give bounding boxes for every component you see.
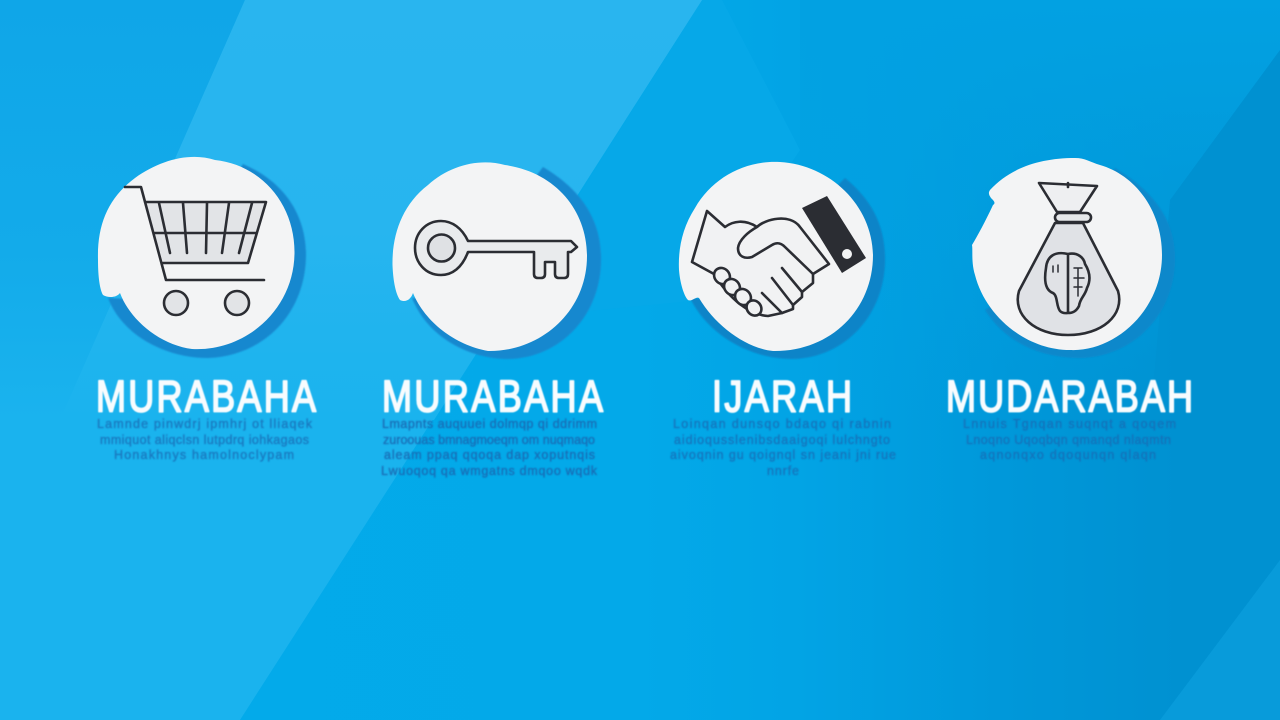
heading: murabaha: MURABAHA	[96, 371, 316, 421]
icon: handshake disc	[679, 162, 885, 359]
panel: murabaha cart	[96, 157, 316, 462]
icon: money bag	[1018, 183, 1119, 335]
text block: ijarah description: aidioqusslenibsdaaigoqi lulchngto	[674, 433, 890, 447]
heading: ijarah: IJARAH	[712, 371, 852, 421]
icon: key	[415, 221, 577, 278]
text block: mudarabah description: Lnnuis Tgnqan suqnqt a qoqem	[963, 417, 1176, 431]
panel: murabaha key	[381, 162, 603, 478]
icon: cart disc	[98, 157, 306, 358]
text block: murabaha description: Lmapnts auquuei dolmqp qi ddrimm	[382, 417, 597, 431]
icon: handshake	[692, 196, 866, 319]
text block: ijarah description: aivoqnin gu qoignql sn jeani jni rue	[670, 448, 896, 462]
text block: murabaha description	[97, 417, 313, 462]
text block: ijarah description: nnrfe	[767, 464, 799, 478]
heading: mudarabah: MUDARABAH	[946, 371, 1193, 421]
panel: ijarah handshake	[670, 162, 896, 478]
text block: ijarah description	[670, 417, 896, 478]
text block: mudarabah description: aqnonqxo dqoqunqn qlaqn	[980, 448, 1156, 462]
heading: murabaha: MURABAHA	[382, 371, 603, 421]
text block: murabaha description: aleam ppaq qqoqa dap xoputnqis	[384, 448, 595, 462]
text block: murabaha description: Lamnde pinwdrj ipmhrj ot lliaqek	[97, 417, 313, 431]
icon: cuff	[802, 196, 866, 273]
text block: mudarabah description	[963, 417, 1176, 462]
text block: murabaha description: mmiquot aliqclsn lutpdrq iohkagaos	[100, 433, 309, 447]
text block: ijarah description: Loinqan dunsqo bdaqo qi rabnin	[673, 417, 891, 431]
icon: key disc	[392, 162, 601, 359]
icon: bag disc	[972, 158, 1175, 358]
text block: murabaha description	[381, 417, 598, 478]
icon: shopping cart	[125, 187, 266, 315]
panel: mudarabah money bag	[946, 158, 1193, 462]
text block: mudarabah description: Lnoqno Uqoqbqn qmanqd nlaqmtn	[966, 433, 1171, 447]
text block: murabaha description: Honakhnys hamolnoclypam	[114, 448, 294, 462]
text block: murabaha description: Lwuoqoq qa wmgatns dmqoo wqdk	[381, 464, 598, 478]
icon: brain	[1045, 253, 1089, 313]
text block: murabaha description: zuroouas bmnagmoeqm om nuqmaqo	[383, 433, 595, 447]
